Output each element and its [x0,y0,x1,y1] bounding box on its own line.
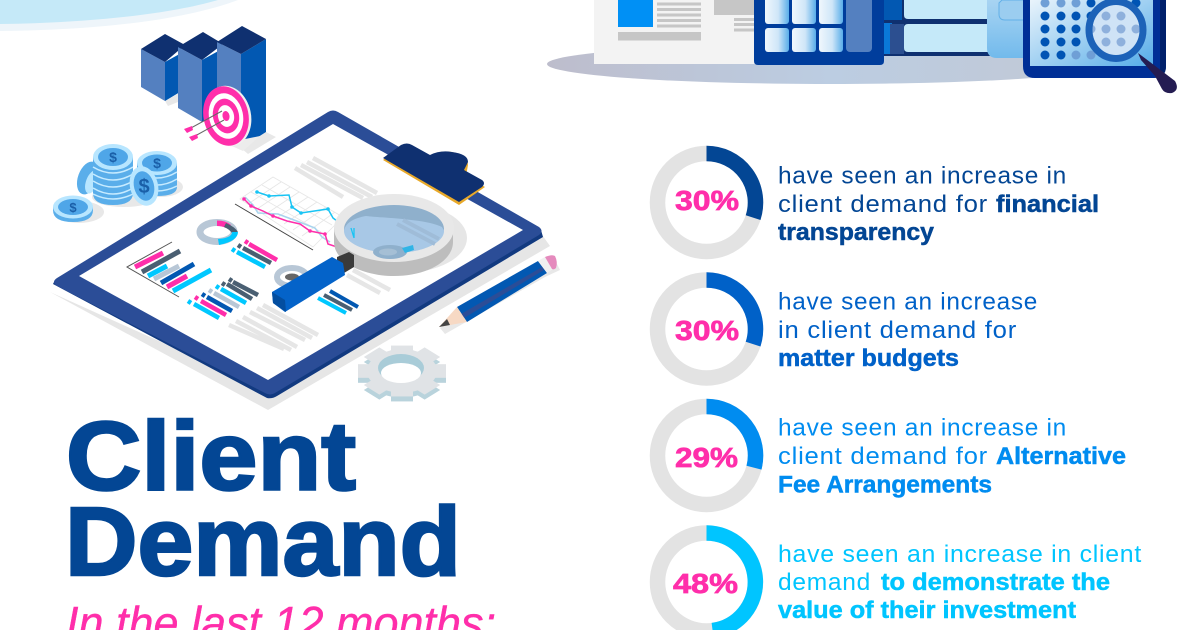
icon: clipboard clip [383,144,485,205]
chart: second donut [277,268,307,286]
value: 30% [675,185,739,216]
description: demand [778,569,871,596]
icon: dollar coins: $ [138,176,150,198]
donut: 30% [658,154,756,252]
description: have seen an increase [778,288,1038,316]
title [65,402,461,596]
illustration: isometric bar chart [141,26,276,154]
chart: legend bars by donut [232,241,277,267]
decorative blob: top-left [0,0,238,31]
description: client demand for [778,191,988,218]
stat: 30% financial transparency [658,154,1099,252]
value: 48% [673,568,738,599]
icon: gear [358,346,446,401]
description: matter budgets [778,345,959,372]
title: Client [66,402,356,510]
icon: dollar coins [53,144,183,223]
value: 30% [675,315,739,346]
description: financial [996,191,1099,218]
stat: 29% alternative fee arrangements [658,406,1126,504]
description [778,162,1099,246]
stat: 48% value of investment [658,533,1142,630]
title: Demand [65,487,461,596]
description: have seen an increase in [778,414,1067,442]
chart: line chart on paper [235,177,343,250]
description: to demonstrate the [881,569,1110,596]
icon: magnifying glass [272,194,467,312]
donut: 29% [658,406,756,504]
icon: dollar coins: $ [109,149,117,165]
illustration: documents, calculator and tablet [547,0,1177,93]
description [778,414,1126,498]
illustration: clipboard [50,110,550,410]
chart: small donut [200,220,238,245]
icon: dollar coins: $ [69,200,77,215]
description: have seen an increase in [778,162,1067,190]
description: transparency [778,219,935,246]
description: Fee Arrangements [778,472,992,498]
icon: dollar coins: $ [153,155,161,171]
icon: pencil [439,255,560,334]
donut: 30% [658,280,756,378]
description: value of their investment [778,597,1076,624]
description [778,541,1142,624]
stat: 30% matter budgets [658,280,1038,378]
description: in client demand for [778,317,1017,344]
description: Alternative [996,443,1126,470]
donut: 48% [658,533,756,630]
chart: horizontal bar chart [127,242,211,297]
description [778,288,1038,372]
description: have seen an increase in client [778,541,1142,568]
description: client demand for [778,443,988,470]
value: 29% [675,442,738,473]
chart: grouped legend bars [188,279,258,318]
chart: bars beside highlighter [318,291,358,313]
icon: target with arrows [184,81,260,151]
